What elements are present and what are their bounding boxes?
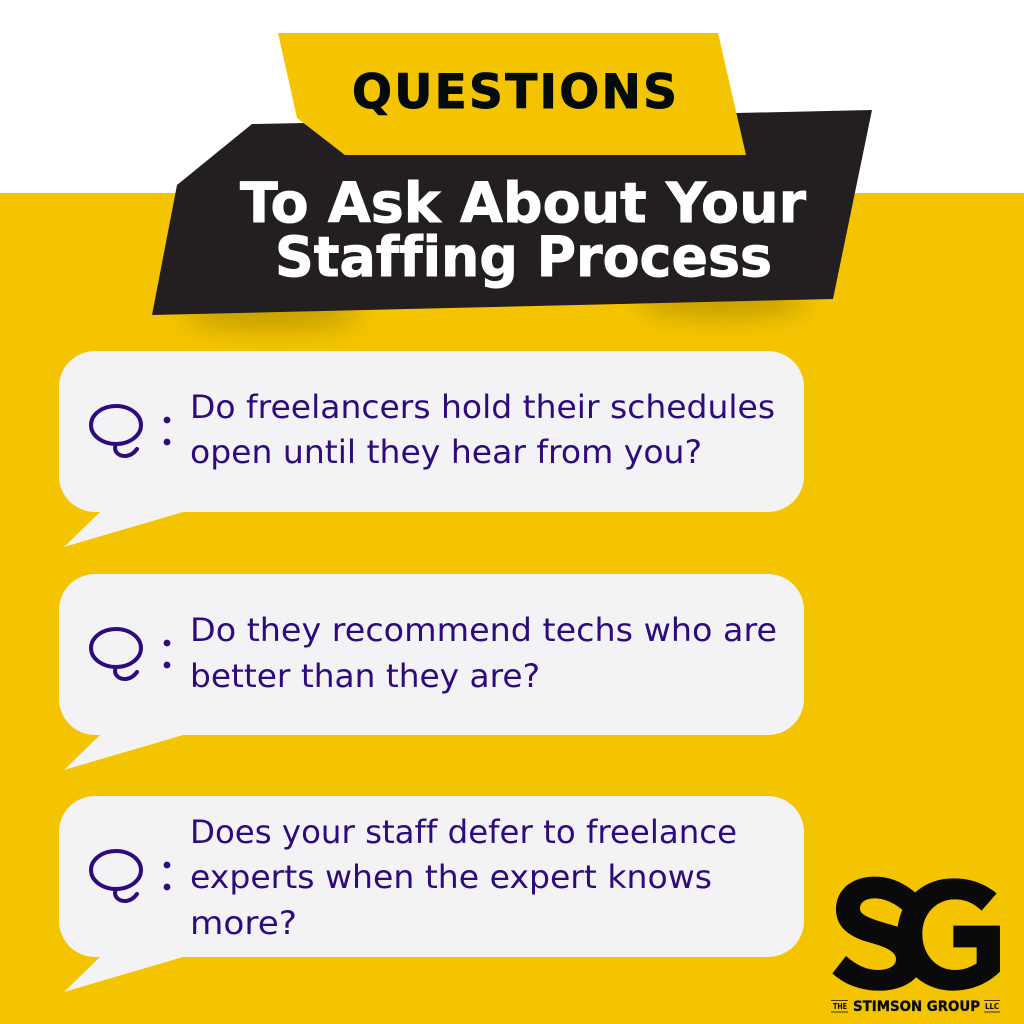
question 2 text: better than they are? [190,657,540,695]
title: To Ask About Your Staffing Process: Staffing Process [275,225,772,289]
logo mark: SG [832,877,1000,991]
logo wordmark: LLC [985,1002,999,1011]
question 1 text: Do freelancers hold their schedules [190,388,775,426]
panel: question 2 speech bubble [59,574,804,770]
question 3 text [190,813,737,942]
title banner: black shape [152,110,872,315]
banner drop shadows [184,284,806,330]
questions banner: yellow shape [278,33,746,155]
question 2 text [190,611,777,695]
icon: Q colon [91,629,170,679]
logo: The Stimson Group LLC [831,877,1000,1015]
logo wordmark: THE [833,1002,847,1011]
title: To Ask About Your Staffing Process: To Ask About Your [240,171,806,235]
title: To Ask About Your Staffing Process [240,171,806,289]
logo wordmark: STIMSON GROUP [853,999,980,1015]
question 3 text: Does your staff defer to freelance [190,813,737,851]
question 3 text: more? [190,904,297,942]
question 1 text: open until they hear from you? [190,433,702,471]
question 2 text: Do they recommend techs who are [190,611,777,649]
panel: question 3 speech bubble [59,796,804,992]
question 3 text: experts when the expert knows [190,858,712,896]
icon: Q colon [91,406,170,456]
panel: question 1 speech bubble [59,351,804,547]
question 1 text [190,388,775,471]
icon: Q colon [91,851,170,901]
heading: QUESTIONS: QUESTIONS [352,65,677,120]
